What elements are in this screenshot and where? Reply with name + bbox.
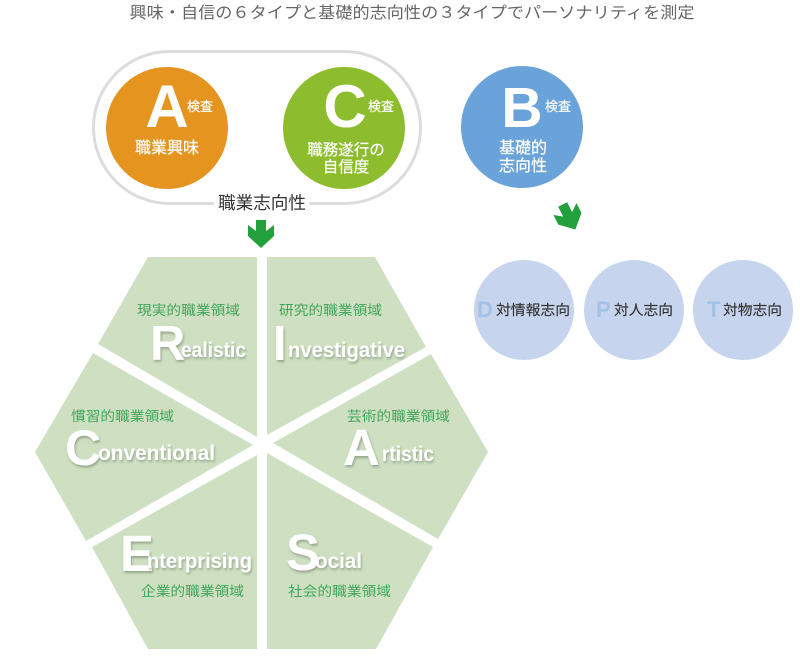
circle: D 対情報志向 xyxy=(474,260,574,360)
segment: Conventional: onventional xyxy=(98,442,215,465)
segment: Investigative: 研究的職業領域 xyxy=(279,302,382,318)
segment: Realistic: ealistic xyxy=(181,339,246,362)
segment: Artistic: A xyxy=(343,419,380,476)
circle: P 対人志向: 対人志向 xyxy=(614,302,673,318)
segment: Realistic: R xyxy=(150,317,185,371)
segment: Enterprising: E xyxy=(120,525,154,582)
segment: Conventional: 慣習的職業領域 xyxy=(71,409,174,424)
pill label: 職業志向性 xyxy=(218,193,306,213)
segment: Social: 社会的職業領域 xyxy=(288,584,391,599)
circle: C 職務遂行の自信度: C xyxy=(323,73,367,140)
circle: D 対情報志向: D xyxy=(477,297,493,322)
circle: A 職業興味: 検査 xyxy=(187,99,213,114)
circle: T 対物志向: T xyxy=(707,297,721,322)
circle: P 対人志向: P xyxy=(596,297,611,322)
pill outline xyxy=(94,52,420,204)
circle: C 職務遂行の自信度: 検査 xyxy=(368,99,394,114)
segment: Social: S xyxy=(286,524,320,581)
segment: Artistic: 芸術的職業領域 xyxy=(347,409,450,424)
group: 職業志向性 pill xyxy=(94,52,420,216)
circle: B 基礎的志向性: 基礎的 xyxy=(499,139,547,157)
title: 興味・自信の６タイプと基礎的志向性の３タイプでパーソナリティを測定 xyxy=(130,4,694,22)
segment: Realistic: 現実的職業領域 xyxy=(137,303,240,318)
arrow: 職業志向性 down xyxy=(248,220,274,248)
segment: Investigative: nvestigative xyxy=(288,339,405,362)
circle: T 対物志向: 対物志向 xyxy=(723,302,782,318)
circle: D 対情報志向: 対情報志向 xyxy=(496,302,570,318)
circle: C 職務遂行の自信度: 自信度 xyxy=(323,158,369,176)
segment: Conventional: C xyxy=(65,420,101,476)
segment: Social xyxy=(267,453,433,649)
circle: A 職業興味: 職業興味 xyxy=(135,139,199,157)
segment: Artistic: rtistic xyxy=(382,443,434,466)
segment: Investigative xyxy=(267,257,426,435)
circle: C 職務遂行の自信度 xyxy=(283,67,405,189)
segment: Enterprising: nterprising xyxy=(147,550,252,573)
circle: A 職業興味: A xyxy=(145,73,189,140)
segment: Enterprising: 企業的職業領域 xyxy=(141,584,244,599)
circle: A 職業興味 xyxy=(106,67,228,189)
circle: B 基礎的志向性: 志向性 xyxy=(499,157,547,175)
circle: T 対物志向 xyxy=(693,260,793,360)
segment: Enterprising xyxy=(92,455,257,649)
circle: P 対人志向 xyxy=(584,260,684,360)
segment: Artistic xyxy=(273,354,488,539)
segment: Investigative: I xyxy=(273,317,287,371)
circle: B 基礎的志向性 xyxy=(461,66,583,188)
segment: Realistic xyxy=(98,257,257,437)
circle: B 基礎的志向性: B xyxy=(501,76,543,140)
segment: Social: ocial xyxy=(315,550,362,573)
arrow: B down-right xyxy=(551,199,587,235)
segment: Conventional xyxy=(35,353,253,541)
circle: B 基礎的志向性: 検査 xyxy=(545,99,571,114)
hexagon chart xyxy=(35,257,488,649)
circle: C 職務遂行の自信度: 職務遂行の xyxy=(307,141,385,159)
